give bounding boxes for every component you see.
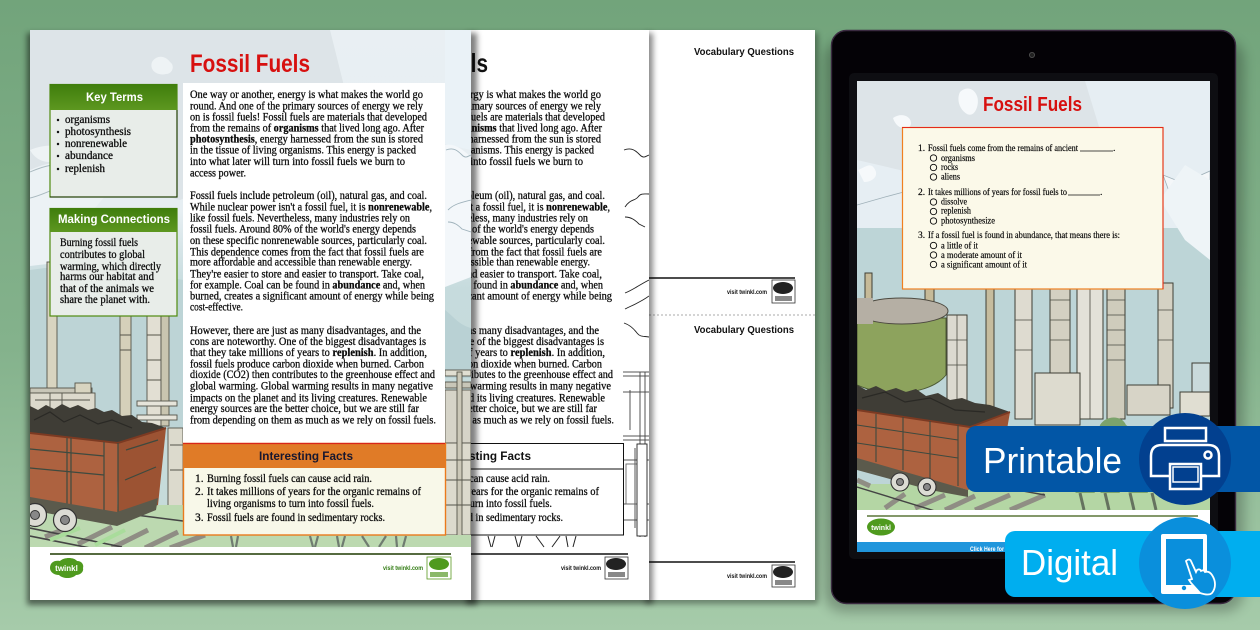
- interesting facts outline box: Interesting Facts: [437, 449, 531, 463]
- rails: [45, 526, 205, 548]
- body text copy: One way or another, energy is what makes the world go: [368, 89, 601, 101]
- body text copy: This dependence comes from the fact that fossil fuels are: [368, 246, 602, 258]
- body text copy: While nuclear power isn't a fossil fuel, it is nonrenewable,: [368, 201, 610, 213]
- reading text lines: impacts on the planet and its living creatures. Renewable: [190, 392, 427, 404]
- question 3: 3.: [918, 231, 925, 241]
- body text copy: cost-effective.: [368, 302, 421, 314]
- reading text lines: However, there are just as many disadvantages, and the: [190, 325, 421, 337]
- refinery towers: [30, 262, 471, 537]
- interesting facts outline box: [361, 444, 624, 535]
- reading text lines: round. And one of the primary sources of energy we rely: [190, 100, 423, 112]
- footer text upper: visit twinkl.com: [727, 290, 767, 296]
- body text copy: more affordable and accessible than renewable energy.: [368, 257, 590, 269]
- question 2: dissolve: [941, 197, 967, 207]
- making connections text: [60, 237, 161, 306]
- question 2: replenish: [941, 207, 971, 217]
- screen illustration: [856, 81, 1210, 511]
- question 1: Fossil fuels come from the remains of ancient: [928, 143, 1078, 154]
- screen ground: [857, 484, 1210, 511]
- reading text lines: They're easier to store and easier to transport. Take coal,: [190, 268, 424, 280]
- footer text copy: visit twinkl.com: [561, 566, 601, 572]
- reading text lines: photosynthesis, energy harnessed from the sun is stored: [190, 134, 423, 146]
- heading: vocabulary questions upper: Vocabulary Questions: [694, 47, 794, 58]
- question 2: [918, 187, 1102, 226]
- tablet device: [824, 30, 1244, 612]
- interesting facts list: It takes millions of years for the organic remains of: [207, 486, 421, 498]
- body text copy: fossil fuels produce carbon dioxide when burned. Carbon: [368, 358, 602, 370]
- reading text lines: from depending on them as much as we rely on fossil fuels.: [190, 414, 436, 426]
- icon: printer: [1139, 413, 1231, 505]
- question 1: aliens: [941, 172, 960, 182]
- reading text lines: One way or another, energy is what makes the world go: [190, 89, 423, 101]
- reading text lines: more affordable and accessible than renewable energy.: [190, 257, 412, 269]
- screen footer: [857, 510, 1210, 542]
- coal wagon: [30, 404, 166, 444]
- reading text lines: into what later will turn into fossil fuels we burn to: [190, 156, 405, 168]
- making connections text: contributes to global: [60, 249, 145, 261]
- question 1: .: [1113, 144, 1115, 154]
- body text copy: on these specific nonrenewable sources, particularly coal.: [368, 235, 605, 247]
- body text copy: in the tissue of living organisms. This energy is packed: [368, 145, 594, 157]
- panel: vocabulary questions sheet: [645, 30, 818, 604]
- interesting facts list: 2.: [195, 486, 204, 498]
- oil tank: [857, 318, 946, 393]
- making connections text: harms our habitat and: [60, 271, 154, 283]
- digital label: Digital: [1021, 542, 1118, 583]
- interesting facts list: Burning fossil fuels can cause acid rain.: [207, 473, 372, 485]
- heading: interesting facts: Interesting Facts: [259, 449, 353, 463]
- key terms list: photosynthesis: [65, 126, 131, 138]
- body text copy: on is fossil fuels! Fossil fuels are materials that developed: [368, 111, 605, 123]
- heading: making connections: Making Connections: [58, 212, 170, 226]
- body text copy: global warming. Global warming results in many negative: [368, 381, 611, 393]
- making connections text: that of the animals we: [60, 283, 154, 295]
- reading text lines: dioxide (CO2) then contributes to the greenhouse effect and: [190, 369, 435, 381]
- title: Fossil Fuels: [190, 50, 310, 78]
- black title copy: Fossil Fuels: [368, 48, 488, 78]
- printable label: Printable: [983, 440, 1122, 481]
- body text copy: into what later will turn into fossil fuels we burn to: [368, 156, 583, 168]
- body text copy: access power.: [368, 168, 424, 180]
- line art trees: [488, 536, 576, 547]
- interesting facts list: 3.: [195, 512, 204, 524]
- reading text lines: for example. Coal can be found in abundance and, when: [190, 280, 425, 292]
- reading text lines: cons are noteworthy. One of the biggest disadvantages is: [190, 336, 426, 348]
- making connections text: Burning fossil fuels: [60, 237, 138, 249]
- reading text lines: This dependence comes from the fact that fossil fuels are: [190, 246, 424, 258]
- interesting facts list: living organisms to turn into fossil fuels.: [207, 498, 374, 510]
- tablet screen: [856, 81, 1210, 553]
- reading text lines: global warming. Global warming results in many negative: [190, 381, 433, 393]
- panel: quiz: [902, 128, 1163, 289]
- illustrated background: [24, 30, 471, 548]
- question 2: photosynthesize: [941, 216, 995, 226]
- question 1: organisms: [941, 154, 975, 164]
- panel: colour reading sheet: [24, 30, 477, 605]
- twinkl logo: [50, 558, 83, 578]
- body text copy: dioxide (CO2) then contributes to the greenhouse effect and: [368, 369, 613, 381]
- reading text lines: fossil fuels. Around 80% of the world's energy depends: [190, 223, 416, 235]
- body text copy: energy sources are the better choice, but we are still far: [368, 403, 597, 415]
- question 3: [918, 230, 1120, 270]
- reading text lines: energy sources are the better choice, but we are still far: [190, 403, 419, 415]
- question 3: a little of it: [941, 240, 978, 251]
- question 3: If a fossil fuel is found in abundance, that means there is:: [928, 230, 1120, 241]
- body text copy: [368, 89, 614, 426]
- body text copy: Fossil fuels include petroleum (oil), natural gas, and coal.: [368, 190, 605, 202]
- body text copy: impacts on the planet and its living creatures. Renewable: [368, 392, 605, 404]
- making connections text: share the planet with.: [60, 294, 150, 306]
- key terms list: abundance: [65, 150, 113, 162]
- interesting facts list: [195, 473, 421, 524]
- question 1: [918, 143, 1115, 182]
- body text copy: that they take millions of years to replenish. In addition,: [368, 347, 605, 359]
- interesting facts outline box: Fossil fuels are found in sedimentary rocks.: [385, 512, 563, 524]
- icon: tablet and hand: [1139, 517, 1231, 609]
- body text copy: round. And one of the primary sources of energy we rely: [368, 100, 601, 112]
- badge copy: [605, 557, 628, 579]
- question 2: .: [1100, 188, 1102, 198]
- key terms list: replenish: [65, 163, 105, 175]
- question 2: It takes millions of years for fossil fuels to: [928, 187, 1067, 198]
- badge upper: [772, 280, 795, 303]
- body text copy: burned, creates a significant amount of energy while being: [368, 291, 612, 303]
- heading: vocabulary questions lower: Vocabulary Questions: [694, 325, 794, 336]
- panel: reading text: [183, 83, 445, 443]
- interesting facts outline box: Burning fossil fuels can cause acid rain.: [385, 473, 550, 485]
- reading text lines: While nuclear power isn't a fossil fuel, it is nonrenewable,: [190, 201, 432, 213]
- body text copy: from depending on them as much as we rely on fossil fuels.: [368, 414, 614, 426]
- badge lower: [772, 565, 795, 587]
- screen twinkl logo: [867, 518, 895, 536]
- reading text lines: in the tissue of living organisms. This energy is packed: [190, 145, 416, 157]
- panel: black and white copy of the reading sheet: [464, 30, 657, 608]
- panel: key terms: [50, 84, 177, 197]
- reading text lines: access power.: [190, 168, 246, 180]
- reading text lines: burned, creates a significant amount of energy while being: [190, 291, 434, 303]
- question 1: rocks: [941, 163, 958, 173]
- twinkl logo: twinkl: [55, 564, 78, 573]
- body text copy: fossil fuels. Around 80% of the world's energy depends: [368, 223, 594, 235]
- screen refinery: [865, 273, 1210, 425]
- interesting facts list: Fossil fuels are found in sedimentary rocks.: [207, 512, 385, 524]
- reading text lines: cost-effective.: [190, 302, 243, 314]
- panel: making connections: [50, 208, 177, 316]
- screen coal wagon: [857, 385, 1010, 427]
- camera: [1029, 52, 1035, 58]
- interesting facts outline box: It takes millions of years for the organic remains of: [385, 486, 599, 498]
- body text copy: for example. Coal can be found in abundance and, when: [368, 280, 603, 292]
- key terms list: organisms: [65, 114, 110, 126]
- key terms list: [57, 114, 131, 175]
- making connections text: warming, which directly: [60, 261, 161, 273]
- screen blue band: [857, 542, 1210, 552]
- footer text: visit twinkl.com: [383, 566, 423, 572]
- body text copy: cons are noteworthy. One of the biggest disadvantages is: [368, 336, 604, 348]
- reading text lines: that they take millions of years to replenish. In addition,: [190, 347, 427, 359]
- reading text lines: on these specific nonrenewable sources, particularly coal.: [190, 235, 427, 247]
- body text copy: photosynthesis, energy harnessed from the sun is stored: [368, 134, 601, 146]
- body text copy: They're easier to store and easier to transport. Take coal,: [368, 268, 602, 280]
- badge: digital: [1005, 517, 1260, 609]
- reading text lines: like fossil fuels. Nevertheless, many industries rely on: [190, 213, 410, 225]
- screen twinkl logo: twinkl: [871, 525, 891, 532]
- screen band text: Click Here for: [970, 547, 1005, 553]
- body text copy: like fossil fuels. Nevertheless, many industries rely on: [368, 213, 588, 225]
- question 2: 2.: [918, 188, 925, 198]
- line art background strip: [623, 149, 649, 537]
- body text copy: However, there are just as many disadvantages, and the: [368, 325, 599, 337]
- screen title: Fossil Fuels: [983, 94, 1082, 116]
- panel: interesting facts: [183, 443, 446, 535]
- ground: [30, 505, 471, 547]
- body text copy: from the remains of organisms that lived long ago. After: [368, 123, 602, 135]
- interesting facts list: 1.: [195, 473, 204, 485]
- reading text lines: fossil fuels produce carbon dioxide when burned. Carbon: [190, 358, 424, 370]
- reading text lines: on is fossil fuels! Fossil fuels are materials that developed: [190, 111, 427, 123]
- heading: key terms: Key Terms: [86, 90, 143, 104]
- trees: [231, 536, 406, 547]
- interesting facts outline box: living organisms to turn into fossil fuels.: [385, 498, 552, 510]
- screen rails: [857, 480, 1045, 510]
- question 1: 1.: [918, 144, 925, 154]
- question 3: a moderate amount of it: [941, 250, 1022, 261]
- reading text lines: [190, 89, 436, 426]
- quality badge: [427, 557, 451, 579]
- reading text lines: from the remains of organisms that lived long ago. After: [190, 123, 424, 135]
- footer text lower: visit twinkl.com: [727, 574, 767, 580]
- question 3: a significant amount of it: [941, 259, 1027, 270]
- reading text lines: Fossil fuels include petroleum (oil), natural gas, and coal.: [190, 190, 427, 202]
- badge: printable: [966, 413, 1260, 505]
- key terms list: nonrenewable: [65, 138, 127, 150]
